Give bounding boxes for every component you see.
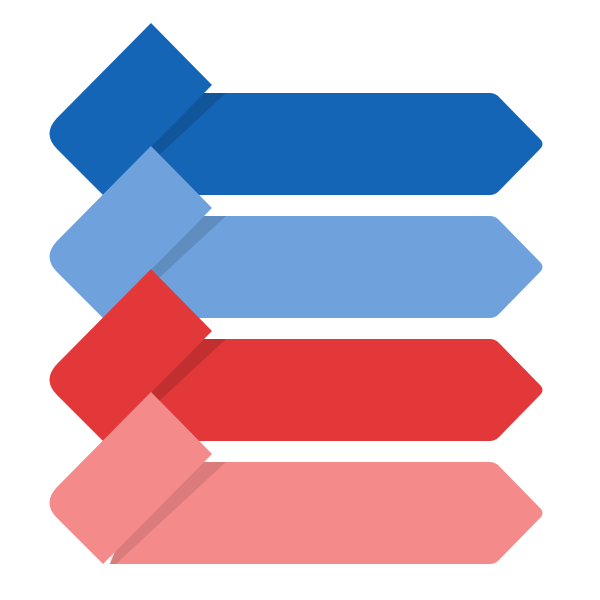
banner 4: pink: [50, 392, 542, 564]
infographic: four stacked arrow banners: [50, 23, 542, 564]
banner 2: light blue: [50, 146, 542, 318]
banner 1: dark blue: [50, 23, 542, 195]
banner 3: red: [50, 269, 542, 441]
